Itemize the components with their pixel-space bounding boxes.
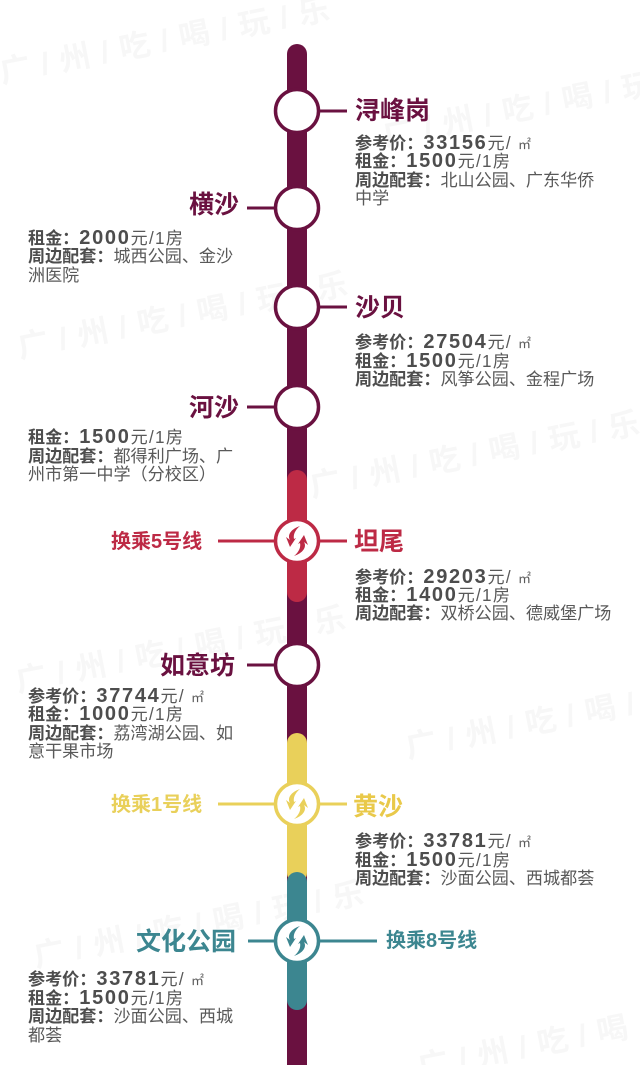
metro line bbox=[287, 44, 307, 1065]
station: 文化公园: 文化公园 bbox=[136, 928, 236, 956]
station: 横沙: 周边配套：城西公园、金沙 bbox=[28, 246, 233, 266]
station: 沙贝 bbox=[276, 286, 594, 389]
station: 河沙: 租金：1500元/1房 bbox=[28, 426, 184, 448]
icon: interchange arrows bbox=[286, 926, 308, 956]
station: 黄沙: 换乘1号线 bbox=[111, 793, 202, 816]
station: 坦尾 bbox=[111, 520, 611, 623]
station: 坦尾: 租金：1400元/1房 bbox=[355, 584, 511, 606]
line 1 segment bbox=[287, 733, 307, 883]
station: 横沙: 洲医院 bbox=[28, 266, 79, 285]
station: 沙贝: 周边配套：风筝公园、金程广场 bbox=[355, 369, 594, 389]
station: 坦尾: 周边配套：双桥公园、德威堡广场 bbox=[355, 603, 611, 623]
station: 如意坊 bbox=[28, 644, 318, 761]
station: 如意坊: 意干果市场 bbox=[28, 742, 113, 761]
station: 黄沙: 周边配套：沙面公园、西城都荟 bbox=[355, 868, 594, 888]
station: 黄沙: 参考价：33781元/ ㎡ bbox=[355, 830, 531, 852]
station: 文化公园: 周边配套：沙面公园、西城 bbox=[28, 1006, 233, 1026]
station: 浔峰岗: 中学 bbox=[355, 189, 389, 208]
background watermarks: 广 / 州 / 吃 / 喝 / 玩 / 乐 bbox=[31, 875, 367, 974]
station: 河沙: 周边配套：都得利广场、广 bbox=[28, 446, 233, 466]
station: 坦尾: 换乘5号线 bbox=[111, 530, 202, 553]
line 8 segment bbox=[287, 872, 307, 1010]
icon: interchange arrows bbox=[286, 789, 308, 819]
station: 沙贝: 参考价：27504元/ ㎡ bbox=[355, 331, 531, 353]
station: 横沙: 租金：2000元/1房 bbox=[28, 227, 184, 249]
station: 文化公园 bbox=[28, 920, 477, 1045]
station: 黄沙: 租金：1500元/1房 bbox=[355, 849, 511, 871]
station: 浔峰岗: 浔峰岗 bbox=[355, 97, 430, 125]
station: 黄沙: 黄沙 bbox=[353, 793, 403, 821]
station: 如意坊: 周边配套：荔湾湖公园、如 bbox=[28, 723, 233, 743]
station: 横沙: 横沙 bbox=[189, 191, 239, 219]
station: 浔峰岗: 参考价：33156元/ ㎡ bbox=[355, 132, 531, 154]
station: 河沙: 州市第一中学（分校区） bbox=[28, 465, 216, 484]
station: 浔峰岗: 租金：1500元/1房 bbox=[355, 150, 511, 172]
station: 文化公园: 租金：1500元/1房 bbox=[28, 987, 184, 1009]
station: 浔峰岗: 周边配套：北山公园、广东华侨 bbox=[355, 170, 594, 190]
background watermarks: 广 / 州 / 吃 / 喝 / 玩 / 乐 bbox=[307, 405, 640, 504]
station: 如意坊: 租金：1000元/1房 bbox=[28, 703, 184, 725]
station: 沙贝: 沙贝 bbox=[355, 294, 405, 322]
background watermarks: 广 / 州 / 吃 / 喝 / 玩 / 乐 bbox=[13, 600, 349, 699]
station: 坦尾: 参考价：29203元/ ㎡ bbox=[355, 566, 531, 588]
station: 河沙: 河沙 bbox=[189, 394, 239, 422]
station: 横沙 bbox=[28, 186, 318, 285]
line 5 segment bbox=[287, 470, 307, 602]
icon: interchange arrows bbox=[286, 526, 308, 556]
station: 如意坊: 参考价：37744元/ ㎡ bbox=[28, 685, 204, 707]
station: 文化公园: 参考价：33781元/ ㎡ bbox=[28, 968, 204, 990]
station: 沙贝: 租金：1500元/1房 bbox=[355, 350, 511, 372]
station: 如意坊: 如意坊 bbox=[160, 651, 235, 680]
station: 河沙 bbox=[28, 386, 318, 484]
background watermarks: 广 / 州 / 吃 / 喝 / 玩 / 乐 bbox=[15, 266, 351, 365]
station: 文化公园: 都荟 bbox=[28, 1026, 62, 1045]
station: 浔峰岗 bbox=[276, 90, 594, 208]
station: 黄沙 bbox=[111, 782, 594, 888]
station: 文化公园: 换乘8号线 bbox=[386, 929, 477, 952]
station: 坦尾: 坦尾 bbox=[354, 528, 404, 556]
